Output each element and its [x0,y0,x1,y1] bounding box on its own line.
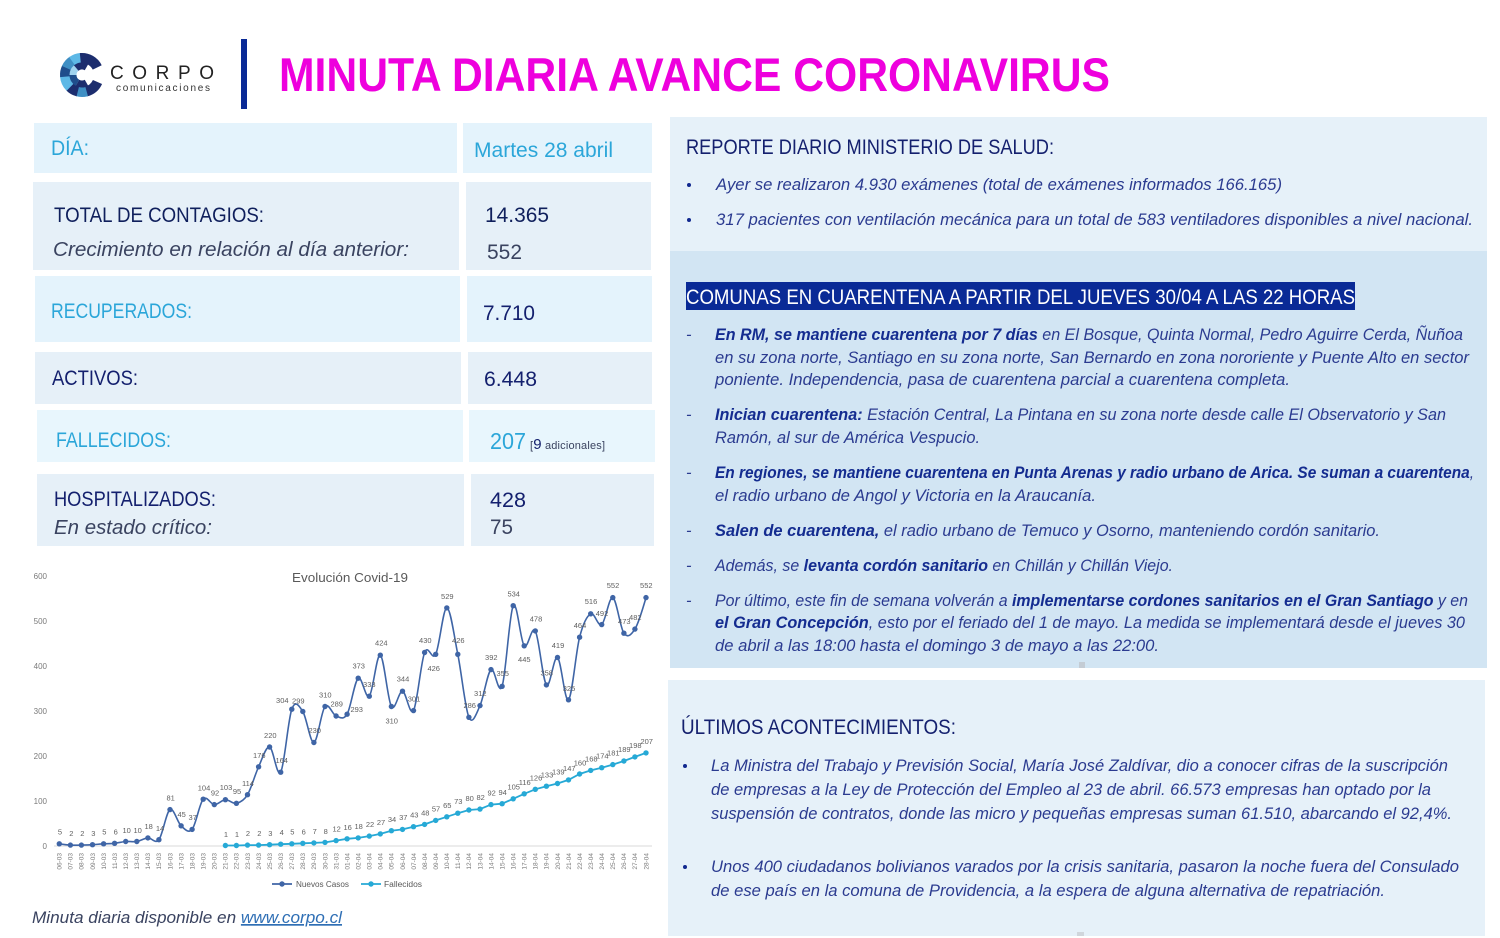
bullet list: reporte: 317 pacientes con ventilación mecánica para un total de 583 ventiladores disponibles a nivel nacional. [716,211,1473,229]
data labels: fallecidos: 4 [280,828,284,837]
x axis date labels: 05-04 [389,853,396,870]
data labels: nuevos casos: 358 [540,668,553,678]
x axis date labels: 20-04 [555,853,562,870]
data labels: fallecidos: 1 [224,830,228,839]
x axis date labels: 18-04 [533,853,540,870]
data labels: nuevos casos: 445 [518,655,531,664]
item: ley de protección del empleo [683,757,1452,823]
x axis date labels: 27-04 [632,853,639,870]
data labels: nuevos casos: 304 [276,696,289,705]
data labels: fallecidos: 65 [443,801,451,810]
x axis date labels: 26-04 [621,853,628,870]
data labels: nuevos casos: 114 [242,779,254,788]
y axis labels: 100 [34,797,48,806]
data labels: fallecidos: 18 [355,822,363,831]
panel: reporte diario [670,117,1487,251]
data labels: fallecidos: 126 [530,774,542,782]
x axis date labels: 18-03 [189,853,196,870]
heading: reporte diario: REPORTE DIARIO MINISTERIO DE SALUD: [686,135,1054,159]
x axis date labels: 16-04 [510,853,518,870]
series: nuevos casos [59,598,646,845]
item: RM: poniente. Independencia, pasa de cuarentena parcial a cuarentena completa. [714,371,1290,389]
item: cordones sanitarios: el Gran Concepción, esto por el feriado del 1 de mayo. La medida se implementará desde el jueves 30 [715,614,1466,632]
x axis date labels: 19-04 [544,853,551,870]
data labels: nuevos casos: 3 [91,829,95,838]
x axis date labels: 09-04 [433,853,440,870]
data labels: fallecidos: 5 [290,828,294,836]
value: hospitalizados: 428 [490,489,526,512]
data labels: fallecidos: 2 [246,829,250,838]
y axis labels [34,572,48,851]
item: regiones [686,464,1474,505]
data labels: nuevos casos: 529 [441,592,454,601]
data labels: nuevos casos: 5 [102,828,106,836]
legend: Fallecidos [384,880,422,889]
data labels: nuevos casos: 478 [530,614,542,624]
data labels: fallecidos: 37 [399,813,407,822]
x axis date labels: 29-03 [311,853,318,870]
panel: fallecidos [37,410,655,462]
item: cordones sanitarios [686,592,1468,655]
x axis date labels: 06-03 [57,853,64,870]
line chart: evolución Covid-19 [34,570,653,889]
note: adicionales: [9 adicionales] [530,436,605,453]
data labels: fallecidos: 94 [499,788,507,797]
value: crítico: 75 [490,516,513,539]
x axis date labels: 26-03 [278,853,285,870]
value: fallecidos: 207 [490,428,526,454]
y axis labels: 200 [34,752,48,761]
x axis date labels: 27-03 [289,853,296,870]
y axis labels: 300 [34,707,48,716]
data labels: nuevos casos: 473 [618,617,631,626]
panel: recuperados [35,276,652,342]
data labels: nuevos casos: 534 [507,590,520,598]
x axis date labels: 12-03 [123,853,130,870]
x axis date labels: 24-04 [599,853,606,870]
data labels: nuevos casos: 289 [330,700,343,708]
x axis date labels: 11-04 [455,853,462,869]
data labels: nuevos casos: 419 [552,641,564,650]
data labels: nuevos casos: 14 [156,824,164,833]
data labels: fallecidos: 3 [268,829,272,838]
x axis date labels: 28-04 [643,853,650,870]
label: fallecidos: FALLECIDOS: [56,429,171,452]
x axis date labels: 06-04 [400,853,407,870]
logo: Corpo comunicaciones [58,51,214,99]
y axis labels: 400 [34,662,48,671]
item: ciudadanos bolivianos: Unos 400 ciudadanos bolivianos varados por la crisis sanitaria, pasaron la noche fuera del Consulado [711,858,1459,876]
data labels: fallecidos: 198 [629,741,642,750]
data labels: fallecidos: 80 [466,794,474,803]
x axis date labels: 19-03 [200,853,208,870]
x axis date labels: 30-03 [322,853,329,870]
panel: últimos acontecimientos [668,680,1485,936]
data labels: fallecidos: 207 [640,737,653,746]
data labels: nuevos casos: 312 [474,689,487,698]
data labels: nuevos casos: 424 [375,638,388,648]
data labels: nuevos casos: 104 [198,784,210,792]
data labels: nuevos casos: 516 [585,597,597,606]
label: día: DÍA: [51,137,89,160]
x axis date labels: 04-04 [378,853,385,870]
data labels: fallecidos: 6 [302,828,306,836]
item: RM: en su zona norte, Santiago en su zona norte, San Bernardo en zona nororiente y Puente Alto en sector [715,349,1470,367]
item: inician cuarentena: - [686,406,692,424]
bullet list: reporte [687,176,1473,229]
label: crecimiento: Crecimiento en relación al día anterior: [53,239,409,261]
data labels: fallecidos: 160 [574,758,586,768]
value: date: Martes 28 abril [474,139,613,162]
item: inician cuarentena [686,406,1446,447]
data labels: nuevos casos: 103 [220,783,232,792]
item: regiones: En regiones, se mantiene cuarentena en Punta Arenas y radio urbano de Arica. Se suman a cuarentena, [715,464,1474,482]
heading: últimos acontecimientos: ÚLTIMOS ACONTECIMIENTOS: [681,714,956,739]
data labels: nuevos casos: 220 [264,731,277,740]
label: recuperados: RECUPERADOS: [51,300,192,323]
x axis date labels: 28-03 [300,853,307,870]
x axis date labels: 02-04 [356,853,362,870]
item: RM [686,325,1470,389]
data labels: nuevos casos: 552 [640,581,653,590]
x axis date labels: 13-03 [134,853,141,870]
y axis labels: 0 [43,842,48,851]
data labels: nuevos casos: 293 [350,705,363,714]
x axis date labels: 20-03 [212,853,219,870]
item: cordones sanitarios: - [686,592,692,610]
item: regiones: - [686,464,692,482]
x axis line [54,845,652,847]
data labels: fallecidos: 92 [488,788,496,798]
series: fallecidos [225,753,646,846]
data labels: fallecidos: 22 [366,820,374,829]
data labels: nuevos casos: 373 [352,662,365,670]
value: activos: 6.448 [484,368,537,391]
panel: total de contagios [33,182,651,270]
x axis date labels: 31-03 [333,853,340,870]
x axis date labels: 17-04 [522,853,528,870]
data labels: nuevos casos: 18 [145,822,153,831]
panel: día [34,123,652,173]
data labels: fallecidos: 105 [507,782,520,792]
x axis date labels: 07-04 [411,853,418,870]
data labels: nuevos casos: 426 [427,664,440,673]
item: ley de protección del empleo: de empresas a la Ley de Protección del Empleo al 23 de abril. 66.573 empresas han optado por la [711,781,1431,799]
data labels: nuevos casos: 164 [275,756,288,765]
y axis labels: 600 [34,572,48,581]
data labels: fallecidos: 189 [618,745,631,754]
data labels: nuevos casos: 310 [319,690,332,700]
data labels: nuevos casos: 2 [80,829,84,838]
data labels: fallecidos: 43 [410,810,418,820]
data labels: nuevos casos: 430 [419,636,432,645]
x axis date labels: 12-04 [466,853,473,870]
item: ley de protección del empleo: suspensión de contratos, donde las micro y pequeñas empresas suman 61.510, abarcando el 92,4%. [711,805,1452,823]
data labels: nuevos casos: 5 [58,828,62,836]
label: hospitalizados: HOSPITALIZADOS: [54,488,216,511]
label: activos: ACTIVOS: [52,367,138,390]
legend [272,880,422,889]
panel: comunas en cuarentena [670,251,1487,668]
data labels: fallecidos: 73 [454,797,462,806]
label: estado crítico: En estado crítico: [54,517,212,539]
data labels: nuevos casos: 10 [134,826,142,835]
x axis date labels: 24-03 [256,853,263,870]
x axis date labels: 15-04 [499,853,506,870]
footer note: Minuta diaria disponible en www.corpo.cl [32,908,343,927]
data labels: nuevos casos: 45 [178,810,186,819]
x axis date labels: 13-04 [477,853,484,870]
data labels: nuevos casos: 492 [596,609,608,618]
data labels: nuevos casos: 301 [408,694,420,704]
data labels: nuevos casos [58,581,653,838]
x axis date labels: 03-04 [367,853,374,870]
logo wordmark: CORPO [110,63,214,84]
data labels: nuevos casos: 176 [253,751,266,760]
data labels: nuevos casos: 92 [211,788,219,798]
item: ciudadanos bolivianos: de ese país en la comuna de Providencia, a la espera de alguna alternativa de repatriación. [711,882,1385,900]
data labels: fallecidos: 133 [541,770,553,780]
item: cordones sanitarios: Por último, este fin de semana volverán a implementarse cordones sanitarios en el Gran Santiago y en [715,592,1468,610]
data labels: fallecidos: 1 [235,830,239,839]
data labels: nuevos casos: 230 [308,726,321,735]
x axis date labels: 11-03 [112,853,119,869]
panel: hospitalizados [37,474,654,546]
x axis date labels: 23-03 [245,853,252,870]
value: total contagios: 14.365 [485,204,549,227]
item: salen de cuarentena: - [686,522,692,540]
data labels: nuevos casos: 2 [69,829,73,838]
x axis date labels: 25-04 [610,853,617,870]
data labels: fallecidos: 8 [324,827,328,836]
data labels: nuevos casos: 426 [452,636,465,645]
data labels: nuevos casos: 325 [563,684,575,693]
item: inician cuarentena: Inician cuarentena: Estación Central, La Pintana en su zona norte desde calle El Observatorio y San [715,406,1446,424]
data labels: fallecidos: 27 [377,818,385,827]
data labels: fallecidos: 168 [585,754,598,764]
item: ciudadanos bolivianos [683,858,1459,900]
data labels: nuevos casos: 392 [485,653,498,662]
item: cordón sanitario: - [686,557,692,575]
data labels: nuevos casos: 6 [114,828,118,836]
data labels: nuevos casos: 310 [385,716,398,726]
data labels: fallecidos: 147 [563,764,576,773]
x axis date labels: 10-03 [101,853,108,870]
x axis date labels: 08-03 [79,853,86,870]
logo mark: mosaic letter C [58,51,106,99]
y axis labels: 500 [34,617,48,626]
chart title: Evolución Covid-19 [292,570,408,585]
item: cordón sanitario: Además, se levanta cordón sanitario en Chillán y Chillán Viejo. [714,557,1173,575]
data labels: fallecidos: 12 [333,824,341,834]
x axis date labels: 16-03 [167,853,174,870]
x axis date labels: 01-04 [344,853,351,870]
x axis date labels: 21-04 [566,853,573,870]
logo subtitle: comunicaciones [116,83,210,94]
x axis date labels: 14-04 [488,853,495,870]
data labels: nuevos casos: 286 [463,701,476,710]
data labels: nuevos casos: 81 [167,794,175,802]
data labels: nuevos casos: 344 [397,674,409,684]
data labels: nuevos casos: 95 [233,787,241,796]
data labels: fallecidos [224,737,653,839]
item: regiones: el radio urbano de Angol y Victoria en la Araucanía. [715,487,1096,505]
x axis date labels [57,853,650,870]
x axis date labels: 21-03 [223,853,230,870]
value: recuperados: 7.710 [483,302,535,325]
data labels: fallecidos: 57 [432,804,440,814]
data labels: nuevos casos: 333 [363,680,376,689]
title divider bar [241,39,247,109]
data labels: fallecidos: 82 [477,793,485,802]
x axis date labels: 25-03 [267,853,274,870]
x axis date labels: 15-03 [156,853,163,870]
x axis date labels: 23-04 [588,853,595,870]
item: inician cuarentena: Ramón, al sur de América Vespucio. [715,429,980,447]
data labels: nuevos casos: 482 [629,613,642,622]
x axis date labels: 22-04 [577,853,584,870]
heading: comunas en cuarentena: COMUNAS EN CUARENTENA A PARTIR DEL JUEVES 30/04 A LAS 22 HORAS [686,285,1355,309]
x axis date labels: 08-04 [422,853,429,870]
data labels: fallecidos: 116 [519,778,531,787]
x axis date labels: 09-03 [90,853,97,870]
data labels: fallecidos: 174 [596,752,609,760]
value: crecimiento: 552 [487,241,522,264]
item: RM: En RM, se mantiene cuarentena por 7 días en El Bosque, Quinta Normal, Pedro Aguirre Cerda, Ñuñoa [715,325,1463,344]
x axis date labels: 17-03 [178,853,185,870]
data labels: fallecidos: 2 [257,829,261,838]
x axis date labels: 14-03 [145,853,152,870]
x axis date labels: 10-04 [444,853,451,870]
data labels: nuevos casos: 37 [189,813,197,822]
bullet list: reporte: Ayer se realizaron 4.930 exámenes (total de exámenes informados 166.165) [715,176,1282,194]
data labels: nuevos casos: 464 [574,621,586,630]
data labels: nuevos casos: 552 [607,581,619,590]
data labels: fallecidos: 139 [552,768,565,776]
item: salen de cuarentena: Salen de cuarentena, el radio urbano de Temuco y Osorno, manteniendo cordón sanitario. [715,522,1380,540]
data labels: fallecidos: 16 [344,823,352,832]
x axis date labels: 22-03 [234,853,241,870]
x axis date labels: 07-03 [68,853,75,870]
panel: activos [35,352,652,404]
item: cordones sanitarios: de abril a las 18:00 hasta el domingo 3 de mayo a las 22:00. [715,637,1159,655]
data labels: fallecidos: 7 [313,827,317,836]
label: total de contagios: TOTAL DE CONTAGIOS: [54,204,264,227]
data labels: nuevos casos: 299 [292,696,305,706]
data labels: nuevos casos: 355 [496,669,509,678]
data labels: nuevos casos: 10 [123,826,131,835]
data labels: fallecidos: 48 [421,808,429,818]
legend: Nuevos Casos [296,880,349,889]
title: MINUTA DIARIA AVANCE CORONAVIRUS [279,48,1110,101]
data labels: fallecidos: 181 [607,748,620,758]
item: RM: - [686,326,692,344]
data labels: fallecidos: 34 [388,815,396,824]
item: ley de protección del empleo: La Ministra del Trabajo y Previsión Social, María José Zaldívar, dio a conocer cifras de la suscripción [711,757,1448,775]
